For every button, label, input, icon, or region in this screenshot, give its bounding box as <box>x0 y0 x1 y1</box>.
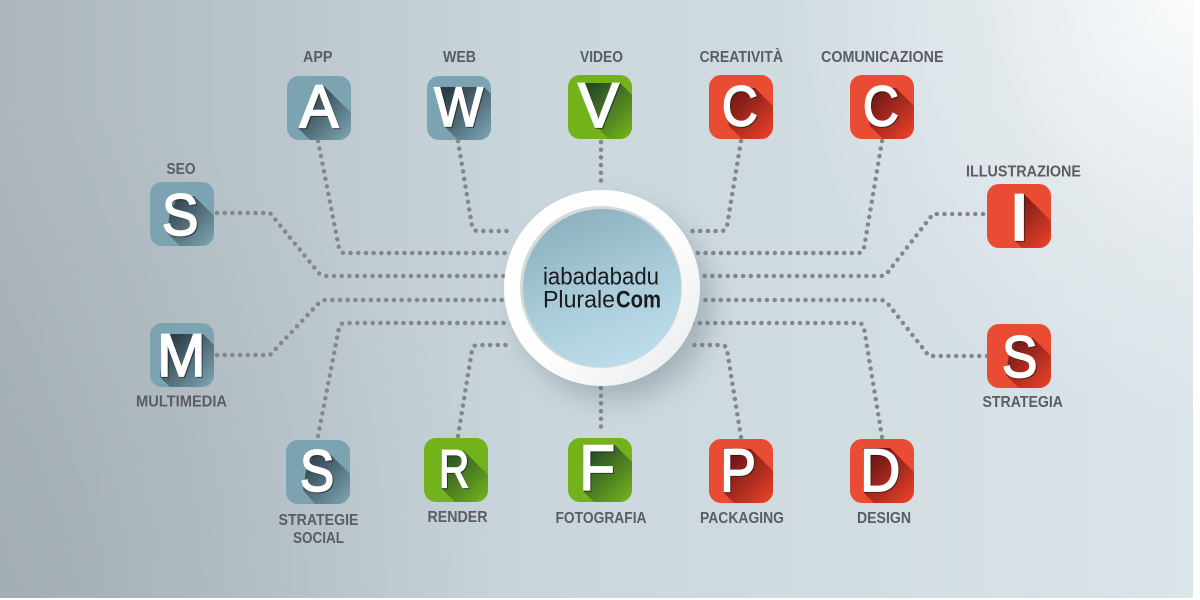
icon: S / STRATEGIA: S <box>1002 325 1037 390</box>
icon: M / MULTIMEDIA <box>137 323 226 406</box>
label: MULTIMEDIA: MULTIMEDIA <box>136 394 227 410</box>
icon: F / FOTOGRAFIA: F <box>579 432 615 504</box>
label: RENDER: RENDER <box>428 509 488 526</box>
label: CREATIVITÀ: CREATIVITÀ <box>700 49 783 66</box>
icon: I / ILLUSTRAZIONE <box>966 164 1081 254</box>
icon: S / SEO <box>150 163 214 246</box>
label: APP: APP <box>303 49 332 66</box>
icon: C / CREATIVITÀ <box>700 48 783 139</box>
label: DESIGN: DESIGN <box>857 510 911 527</box>
icon: V / VIDEO: V <box>578 71 619 141</box>
dotted connectors <box>217 141 987 437</box>
icon: S / STRATEGIE SOCIAL <box>279 440 358 543</box>
label: PACKAGING: PACKAGING <box>700 510 784 527</box>
logo text: iabadabadu <box>543 264 659 290</box>
icon: W / WEB: W <box>434 76 483 138</box>
icon: P / PACKAGING: P <box>720 437 756 504</box>
icon: W / WEB <box>427 51 491 140</box>
label: COMUNICAZIONE: COMUNICAZIONE <box>821 49 944 66</box>
icon: C / COMUNICAZIONE: C <box>863 74 899 138</box>
icon: R / RENDER: R <box>439 440 469 499</box>
icon: I / ILLUSTRAZIONE: I <box>1009 180 1030 254</box>
label: SEO: SEO <box>166 161 196 178</box>
icon: F / FOTOGRAFIA <box>556 438 646 523</box>
logo text <box>543 264 661 314</box>
label: ILLUSTRAZIONE: ILLUSTRAZIONE <box>966 164 1081 180</box>
icon: S / STRATEGIE SOCIAL: S <box>300 439 334 504</box>
icon: P / PACKAGING <box>700 439 784 523</box>
label: STRATEGIA: STRATEGIA <box>982 394 1063 411</box>
central badge <box>504 190 711 399</box>
label: STRATEGIE SOCIAL: SOCIAL <box>293 530 344 547</box>
icon: A / APP <box>287 51 351 140</box>
label: FOTOGRAFIA: FOTOGRAFIA <box>556 510 646 527</box>
icon: V / VIDEO <box>568 51 632 139</box>
icon: D / DESIGN: D <box>860 437 900 504</box>
icon: D / DESIGN <box>850 439 914 523</box>
label: STRATEGIE SOCIAL: STRATEGIE <box>278 512 358 529</box>
icon: C / COMUNICAZIONE <box>821 49 947 139</box>
logo text: Com <box>616 286 661 314</box>
icon: S / SEO: S <box>162 183 198 248</box>
icon: R / RENDER <box>424 438 488 522</box>
label: VIDEO: VIDEO <box>580 49 623 66</box>
label: WEB: WEB <box>443 49 476 66</box>
label: STRATEGIE SOCIAL <box>278 512 358 547</box>
logo text: Plurale <box>543 286 615 314</box>
icon: C / CREATIVITÀ: C <box>722 74 758 138</box>
icon: A / APP: A <box>300 73 338 140</box>
icon: S / STRATEGIA <box>983 324 1062 407</box>
icon: M / MULTIMEDIA: M <box>157 322 205 389</box>
